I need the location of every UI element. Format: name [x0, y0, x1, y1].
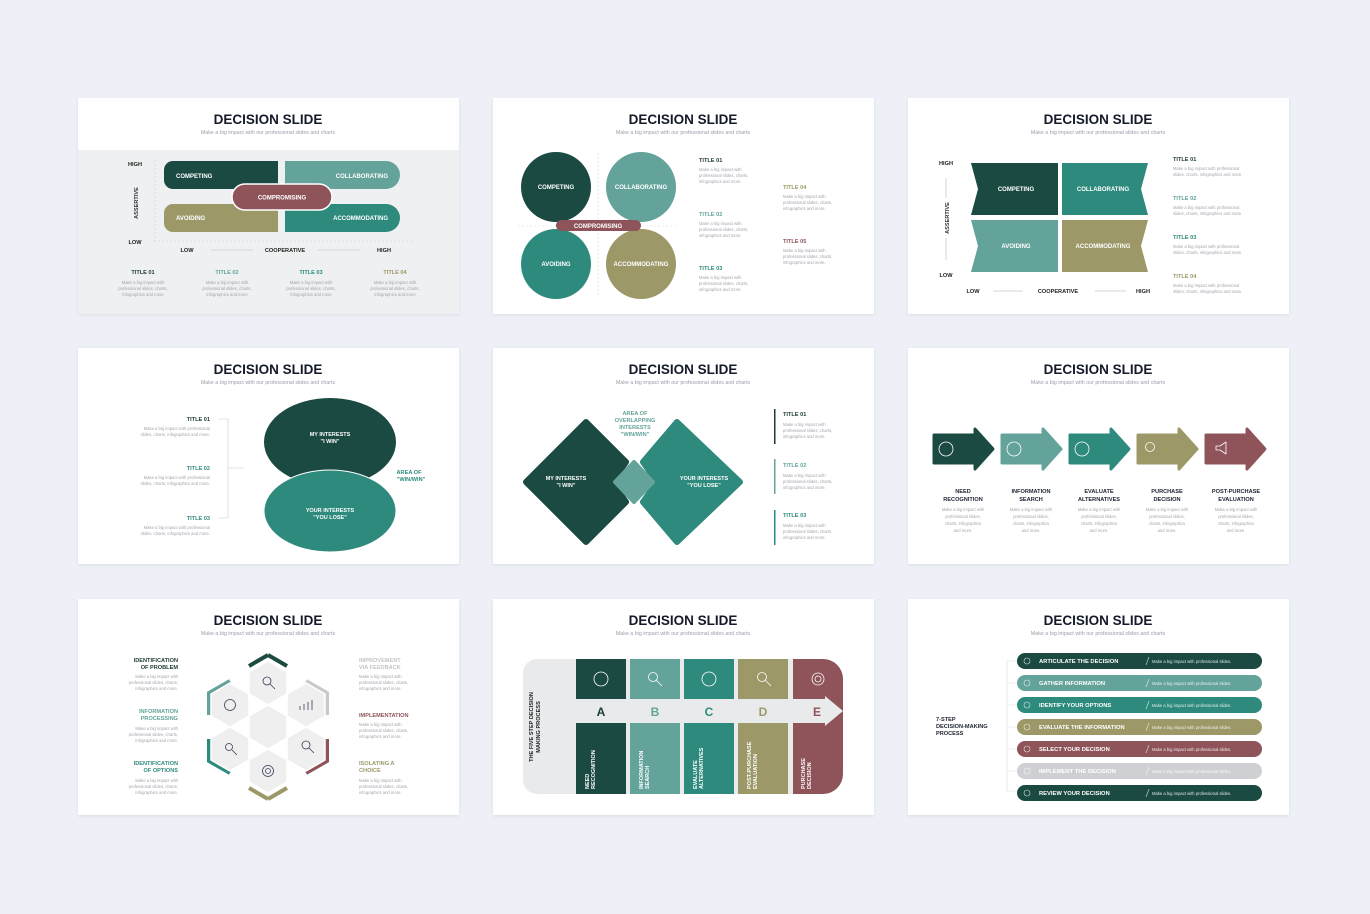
title: Make a big impact with our professional slides and charts	[616, 380, 750, 386]
step labels: RECOGNITION	[943, 497, 983, 503]
axis: cooperative: HIGH	[377, 248, 391, 254]
diamonds: "I WIN"	[557, 483, 576, 489]
left titles: Make a big impact with professional	[144, 525, 210, 530]
process board: MAKING PROCESS	[536, 701, 542, 753]
titles row: TITLE 03	[299, 270, 323, 276]
callout: overlap	[615, 411, 655, 438]
step labels: POST-PURCHASE	[1212, 489, 1260, 495]
right text: IMPROVEMENT	[359, 658, 401, 664]
titles row: Make a big impact with	[122, 280, 165, 285]
ellipses: YOUR INTERESTS	[306, 508, 354, 514]
side label: 7-STEP	[936, 717, 956, 723]
quadrant blocks: COMPETING	[176, 174, 213, 180]
callout: win/win: AREA OF	[397, 470, 422, 476]
titles: TITLE 03	[699, 266, 722, 272]
step labels: professional slides,	[1081, 514, 1117, 519]
process board: PURCHASE	[801, 758, 807, 789]
step labels: and more.	[1022, 528, 1040, 533]
left text: professional slides, charts,	[129, 732, 178, 737]
step labels: DECISION	[1153, 497, 1181, 503]
circle grid: COMPROMISING	[574, 224, 622, 230]
step labels: professional slides,	[1149, 514, 1185, 519]
titles: Make a big impact with	[699, 275, 742, 280]
left titles: slides, charts, infographics and more.	[141, 481, 210, 486]
title: Make a big impact with our professional slides and charts	[201, 380, 335, 386]
axis: cooperative: LOW	[180, 248, 194, 254]
titles: TITLE 04	[1173, 274, 1197, 280]
titles: Make a big impact with	[783, 248, 826, 253]
process board: B	[651, 705, 660, 719]
step labels: and more.	[954, 528, 972, 533]
step labels: and more.	[1090, 528, 1108, 533]
process board: INFORMATION	[639, 751, 645, 789]
arrows	[934, 429, 1265, 469]
axes	[939, 161, 1150, 295]
process board: D	[759, 705, 768, 719]
titles row: infographics and more	[122, 292, 164, 297]
right text: ISOLATING A	[359, 761, 394, 767]
titles: TITLE 03	[783, 513, 806, 519]
title: Make a big impact with our professional slides and charts	[616, 130, 750, 136]
titles: Make a big impact with	[783, 473, 826, 478]
left text: OF OPTIONS	[144, 768, 178, 774]
titles: professional slides, charts,	[783, 428, 832, 433]
slide 2: circles	[493, 98, 874, 314]
step labels: EVALUATE	[1084, 489, 1114, 495]
step pills: GATHER INFORMATION	[1039, 681, 1105, 687]
ellipses: "YOU LOSE"	[313, 515, 347, 521]
step labels	[942, 489, 1260, 533]
title: DECISION SLIDE	[214, 112, 322, 127]
step labels: Make a big impact with	[942, 507, 985, 512]
titles row: professional slides, charts,	[286, 286, 336, 291]
titles row: infographics and more	[290, 292, 332, 297]
callout: overlap: AREA OF	[623, 411, 648, 417]
titles: professional slides, charts,	[783, 529, 832, 534]
titles: TITLE 04	[783, 185, 807, 191]
circle grid: COMPETING	[538, 185, 574, 191]
title: Make a big impact with our professional slides and charts	[616, 631, 750, 637]
title: Make a big impact with our professional slides and charts	[1031, 130, 1165, 136]
circle grid: ACCOMMODATING	[614, 262, 669, 268]
left text: Make a big impact with	[135, 674, 179, 679]
titles: slides, charts, infographics and more.	[1173, 172, 1242, 177]
titles: infographics and more.	[783, 260, 826, 265]
left text: IDENTIFICATION	[134, 658, 178, 664]
diamonds: MY INTERESTS	[546, 476, 587, 482]
callout: overlap: OVERLAPPING	[615, 418, 655, 424]
step labels: PURCHASE	[1151, 489, 1183, 495]
step labels: EVALUATION	[1218, 497, 1254, 503]
quadrant blocks	[164, 161, 400, 232]
right text: VIA FEEDBACK	[359, 665, 401, 671]
titles: slides, charts, infographics and more.	[1173, 250, 1242, 255]
right text: infographics and more.	[359, 734, 402, 739]
step pills	[1017, 653, 1262, 801]
quadrant blocks: AVOIDING	[1001, 244, 1031, 250]
axis: assertive	[128, 160, 414, 246]
titles row: TITLE 01	[131, 270, 155, 276]
callout: overlap: "WIN/WIN"	[621, 432, 650, 438]
left text: infographics and more.	[135, 738, 178, 743]
step pills: EVALUATE THE INFORMATION	[1039, 725, 1125, 731]
right text: Make a big impact with	[359, 674, 402, 679]
process board	[523, 659, 843, 794]
step labels: charts, infographics	[1218, 521, 1254, 526]
step labels: NEED	[955, 489, 971, 495]
titles row: infographics and more	[206, 292, 248, 297]
title: DECISION SLIDE	[1044, 112, 1152, 127]
left titles: Make a big impact with professional	[144, 426, 210, 431]
slide 9: seven step list	[908, 599, 1289, 815]
callout: overlap: INTERESTS	[619, 425, 651, 431]
left titles: Make a big impact with professional	[144, 475, 210, 480]
titles: professional slides, charts,	[699, 281, 748, 286]
titles row	[118, 270, 420, 297]
step pills: Make a big impact with professional slides.	[1152, 769, 1231, 774]
right text: CHOICE	[359, 768, 381, 774]
titles: Make a big impact with	[783, 523, 826, 528]
step labels: charts, infographics	[945, 521, 981, 526]
titles row: professional slides, charts,	[118, 286, 168, 291]
step labels: Make a big impact with	[1215, 507, 1258, 512]
quadrant blocks: ACCOMMODATING	[333, 216, 388, 222]
axes: COOPERATIVE	[1038, 289, 1078, 295]
process board: SEARCH	[645, 766, 651, 789]
titles row: infographics and more	[374, 292, 416, 297]
left text	[129, 658, 179, 795]
left text: OF PROBLEM	[141, 665, 178, 671]
step labels: charts, infographics	[1081, 521, 1117, 526]
title: Make a big impact with our professional slides and charts	[201, 631, 335, 637]
slide 5: diamonds	[493, 348, 874, 564]
ellipses: "I WIN"	[321, 439, 340, 445]
titles row: TITLE 04	[383, 270, 408, 276]
right text: infographics and more.	[359, 686, 402, 691]
step labels: Make a big impact with	[1010, 507, 1053, 512]
titles: professional slides, charts,	[699, 227, 748, 232]
titles: TITLE 01	[699, 158, 722, 164]
title: Make a big impact with our professional slides and charts	[1031, 631, 1165, 637]
title: DECISION SLIDE	[629, 362, 737, 377]
titles row: Make a big impact with	[374, 280, 417, 285]
title	[616, 112, 750, 136]
right text: Make a big impact with	[359, 778, 402, 783]
title	[616, 613, 750, 637]
process board: C	[705, 705, 714, 719]
axis: assertive: HIGH	[128, 162, 142, 168]
titles: infographics and more.	[699, 287, 742, 292]
process board: NEED	[585, 774, 591, 789]
titles: TITLE 02	[699, 212, 722, 218]
step labels: SEARCH	[1019, 497, 1043, 503]
titles: infographics and more.	[783, 485, 826, 490]
step pills: Make a big impact with professional slides.	[1152, 681, 1231, 686]
process board: ALTERNATIVES	[699, 747, 705, 789]
title	[616, 362, 750, 386]
slide 7: hexagons	[78, 599, 459, 815]
process board: THE FIVE STEP DECISION	[529, 692, 535, 762]
step labels: and more.	[1227, 528, 1245, 533]
title	[1031, 613, 1165, 637]
step labels: charts, infographics	[1149, 521, 1185, 526]
right text	[359, 658, 409, 795]
titles: infographics and more.	[783, 535, 826, 540]
titles: Make a big impact with	[699, 221, 742, 226]
circle grid: COLLABORATING	[615, 185, 667, 191]
side label: DECISION-MAKING	[936, 724, 988, 730]
step pills: Make a big impact with professional slides.	[1152, 659, 1231, 664]
left text: infographics and more.	[135, 686, 178, 691]
diamonds: YOUR INTERESTS	[680, 476, 728, 482]
circle grid: AVOIDING	[541, 262, 571, 268]
axis: assertive: LOW	[128, 240, 142, 246]
title	[201, 613, 335, 637]
title: DECISION SLIDE	[1044, 362, 1152, 377]
right text: Make a big impact with	[359, 722, 402, 727]
titles: infographics and more.	[783, 434, 826, 439]
step labels: professional slides,	[945, 514, 981, 519]
right text: professional slides, charts,	[359, 784, 408, 789]
titles	[699, 158, 832, 292]
titles: TITLE 01	[1173, 157, 1196, 163]
callout: win/win: "WIN/WIN"	[397, 477, 426, 483]
titles: professional slides, charts,	[699, 173, 748, 178]
step labels: Make a big impact with	[1146, 507, 1189, 512]
axes: ASSERTIVE	[945, 202, 951, 234]
axes: LOW	[966, 289, 980, 295]
titles row: TITLE 02	[215, 270, 239, 276]
axis: cooperative	[180, 248, 391, 254]
quadrant blocks: AVOIDING	[176, 216, 206, 222]
step labels: and more.	[1158, 528, 1176, 533]
titles: TITLE 02	[1173, 196, 1196, 202]
titles: TITLE 05	[783, 239, 806, 245]
right text: professional slides, charts,	[359, 728, 408, 733]
slide 1: quadrant conflict styles	[78, 98, 459, 314]
left titles	[141, 417, 244, 536]
titles: infographics and more.	[783, 206, 826, 211]
step pills: Make a big impact with professional slides.	[1152, 791, 1231, 796]
step labels: professional slides,	[1013, 514, 1049, 519]
step pills: SELECT YOUR DECISION	[1039, 747, 1110, 753]
step labels: professional slides,	[1218, 514, 1254, 519]
title	[1031, 112, 1165, 136]
title: DECISION SLIDE	[1044, 613, 1152, 628]
left titles: slides, charts, infographics and more.	[141, 432, 210, 437]
titles row: Make a big impact with	[206, 280, 249, 285]
left text: professional slides, charts,	[129, 680, 178, 685]
title: DECISION SLIDE	[629, 613, 737, 628]
titles: slides, charts, infographics and more.	[1173, 211, 1242, 216]
process board: EVALUATION	[753, 754, 759, 789]
step pills: IDENTIFY YOUR OPTIONS	[1039, 703, 1111, 709]
titles: Make a big impact with professional	[1173, 205, 1239, 210]
title	[201, 112, 335, 136]
left titles: slides, charts, infographics and more.	[141, 531, 210, 536]
slide 3: chevron quadrants	[908, 98, 1289, 314]
right text: infographics and more.	[359, 790, 402, 795]
left text: Make a big impact with	[135, 726, 179, 731]
quadrant blocks: COLLABORATING	[1077, 187, 1129, 193]
titles: Make a big impact with professional	[1173, 166, 1239, 171]
titles	[774, 409, 832, 545]
step labels: ALTERNATIVES	[1078, 497, 1120, 503]
diamonds	[526, 422, 740, 542]
step pills: REVIEW YOUR DECISION	[1039, 791, 1110, 797]
left text: IDENTIFICATION	[134, 761, 178, 767]
axes: HIGH	[1136, 289, 1150, 295]
ellipses: MY INTERESTS	[310, 432, 351, 438]
title: Make a big impact with our professional slides and charts	[201, 130, 335, 136]
titles: TITLE 01	[783, 412, 806, 418]
right text: IMPLEMENTATION	[359, 713, 409, 719]
hexagon cluster	[209, 655, 327, 799]
left text: Make a big impact with	[135, 778, 179, 783]
step pills: Make a big impact with professional slides.	[1152, 747, 1231, 752]
left text: PROCESSING	[141, 716, 178, 722]
circle grid	[518, 152, 678, 299]
titles: Make a big impact with professional	[1173, 244, 1239, 249]
title	[201, 362, 335, 386]
left text: infographics and more.	[135, 790, 178, 795]
titles	[1173, 157, 1242, 294]
titles: professional slides, charts,	[783, 479, 832, 484]
left titles: TITLE 02	[187, 466, 210, 472]
titles row: professional slides, charts,	[370, 286, 420, 291]
title	[1031, 362, 1165, 386]
ellipses	[264, 398, 396, 552]
process board: E	[813, 705, 821, 719]
process board: EVALUATE	[693, 760, 699, 789]
titles: Make a big impact with	[783, 422, 826, 427]
right text: professional slides, charts,	[359, 680, 408, 685]
step pills: ARTICULATE THE DECISION	[1039, 659, 1118, 665]
titles: Make a big impact with	[783, 194, 826, 199]
quadrant blocks: COMPROMISING	[258, 196, 306, 202]
process board: POST-PURCHASE	[747, 741, 753, 789]
step labels: Make a big impact with	[1078, 507, 1121, 512]
left text: professional slides, charts,	[129, 784, 178, 789]
left titles: TITLE 03	[187, 516, 210, 522]
callout: win/win	[397, 470, 426, 483]
process board: A	[597, 705, 606, 719]
process board: DECISION	[807, 762, 813, 789]
process board: RECOGNITION	[591, 750, 597, 789]
step pills: Make a big impact with professional slides.	[1152, 703, 1231, 708]
titles row: Make a big impact with	[290, 280, 333, 285]
side label	[936, 661, 1017, 791]
quadrant blocks: COMPETING	[998, 187, 1034, 193]
titles row: professional slides, charts,	[202, 286, 252, 291]
axis: assertive: ASSERTIVE	[134, 187, 140, 219]
step pills: IMPLEMENT THE DECISION	[1039, 769, 1116, 775]
quadrant blocks: ACCOMMODATING	[1076, 244, 1131, 250]
axes: LOW	[939, 273, 953, 279]
slide 6: arrow process	[908, 348, 1289, 564]
title: Make a big impact with our professional slides and charts	[1031, 380, 1165, 386]
diamonds: "YOU LOSE"	[687, 483, 721, 489]
titles: Make a big impact with	[699, 167, 742, 172]
titles: professional slides, charts,	[783, 254, 832, 259]
titles: TITLE 02	[783, 463, 806, 469]
quadrant blocks	[971, 163, 1148, 272]
titles: infographics and more.	[699, 179, 742, 184]
axis: cooperative: COOPERATIVE	[265, 248, 305, 254]
title: DECISION SLIDE	[629, 112, 737, 127]
slide 4: ellipses	[78, 348, 459, 564]
left titles: TITLE 01	[187, 417, 210, 423]
step labels: INFORMATION	[1011, 489, 1051, 495]
left text: INFORMATION	[139, 709, 178, 715]
axes: HIGH	[939, 161, 953, 167]
title: DECISION SLIDE	[214, 362, 322, 377]
titles: Make a big impact with professional	[1173, 283, 1239, 288]
titles: TITLE 03	[1173, 235, 1196, 241]
quadrant blocks: COLLABORATING	[336, 174, 388, 180]
titles: slides, charts, infographics and more.	[1173, 289, 1242, 294]
titles: infographics and more.	[699, 233, 742, 238]
titles: professional slides, charts,	[783, 200, 832, 205]
step pills: Make a big impact with professional slides.	[1152, 725, 1231, 730]
slide 8: five step process	[493, 599, 874, 815]
side label: PROCESS	[936, 731, 964, 737]
title: DECISION SLIDE	[214, 613, 322, 628]
step labels: charts, infographics	[1013, 521, 1049, 526]
